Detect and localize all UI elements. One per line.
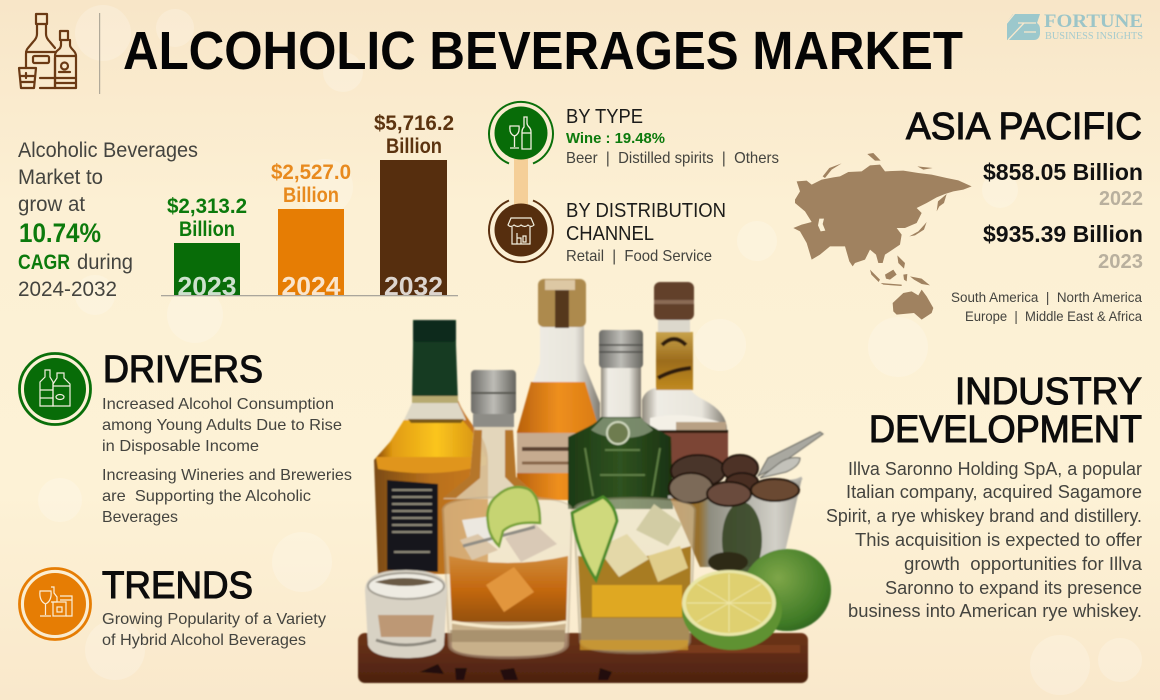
text: industry development: Illva Saronno Holding SpA, a popular — [848, 459, 1142, 479]
text: driver one: among Young Adults Due to Rise — [102, 417, 342, 434]
icon: by type — [489, 102, 553, 164]
Asia Pacific values: $935.39 Billion — [983, 221, 1143, 247]
text: industry development: business into American rye whiskey. — [848, 601, 1142, 621]
lime half — [682, 570, 782, 650]
whole lime — [743, 549, 831, 631]
bar: 2023: Billion — [179, 218, 235, 241]
icon: bottles and glass — [19, 14, 76, 88]
glass: golden whisky — [574, 498, 695, 653]
caspian — [818, 219, 825, 231]
heading: industry development: DEVELOPMENT — [869, 409, 1142, 451]
text: industry development: Saronno to expand its presence — [885, 578, 1142, 598]
heading: trends: TRENDS — [102, 565, 253, 607]
Asia Pacific values: $858.05 Billion — [983, 159, 1143, 185]
heading: industry development — [869, 371, 1142, 451]
bar: 2023: 2023 — [178, 271, 236, 301]
bar: 2032 — [374, 112, 454, 301]
text: industry development — [826, 459, 1143, 621]
text: industry development: Italian company, acquired Sagamore — [846, 482, 1142, 502]
Asia Pacific values: 2022 — [1099, 188, 1143, 210]
illustration: bottles, glasses and limes on a board — [358, 279, 831, 683]
bottle: center tall amber — [517, 279, 600, 500]
heading: Asia Pacific: ASIA PACIFIC — [906, 106, 1142, 148]
text: by type — [566, 106, 779, 167]
CAGR text block: Alcoholic Beverages — [18, 139, 198, 162]
bar: 2032: $5,716.2 — [374, 112, 454, 135]
Asia Pacific values: 2023 — [1098, 251, 1143, 273]
CAGR text block: Market to — [18, 166, 103, 189]
text: industry development: This acquisition is expected to offer — [855, 530, 1142, 550]
text: driver one: Increased Alcohol Consumption — [102, 396, 334, 413]
bar: 2032: 2032 — [384, 271, 443, 301]
lime wedge right — [572, 497, 617, 580]
heading: industry development: INDUSTRY — [955, 371, 1142, 413]
text: industry development: Spirit, a rye whiskey brand and distillery. — [826, 506, 1142, 526]
Asia Pacific values — [983, 159, 1143, 273]
text: trends description: Growing Popularity of a Variety — [102, 611, 326, 628]
icon: by distribution channel — [489, 200, 553, 262]
logo: Fortune Business Insights — [1006, 11, 1143, 42]
board — [358, 633, 808, 683]
shot glass — [365, 570, 447, 658]
text: by type: Beer | Distilled spirits | Others — [566, 150, 779, 167]
other regions: Europe | Middle East & Africa — [965, 309, 1142, 324]
text: by type: BY TYPE — [566, 106, 643, 128]
other regions: South America | North America — [951, 290, 1142, 305]
heading: drivers: DRIVERS — [103, 349, 263, 391]
text: driver two: Beverages — [102, 509, 178, 526]
logo: Fortune Business Insights: FORTUNE — [1044, 11, 1143, 32]
CAGR text block: 2024-2032 — [18, 278, 117, 301]
panel: trends — [20, 565, 326, 649]
bar: 2023 — [167, 195, 247, 301]
connector between segment icons — [514, 158, 528, 206]
bottle: left whisky — [374, 320, 488, 574]
icon: drivers — [20, 354, 90, 424]
text: trends description — [102, 611, 326, 649]
text: industry development: growth opportunities for Illva — [904, 554, 1143, 574]
text: trends description: of Hybrid Alcohol Beverages — [102, 632, 306, 649]
other regions — [951, 290, 1142, 324]
CAGR text block — [18, 139, 198, 301]
bottle: silver cap — [443, 370, 541, 499]
text: by distribution channel: CHANNEL — [566, 223, 654, 245]
text: driver one: in Disposable Income — [102, 438, 259, 455]
bar chart — [161, 112, 458, 301]
bottle: back right with brown cap — [642, 282, 728, 473]
text: by distribution channel: BY DISTRIBUTION — [566, 200, 726, 222]
bar: 2024 — [271, 161, 351, 301]
text: driver two: Increasing Wineries and Breweries — [102, 467, 352, 484]
bar: 2032: Billion — [386, 135, 442, 158]
CAGR text block: grow at — [18, 193, 85, 216]
title: ALCOHOLIC BEVERAGES MARKET — [123, 21, 963, 81]
glass: amber whisky — [443, 497, 572, 658]
CAGR text block: during — [77, 251, 133, 274]
logo: Fortune Business Insights: BUSINESS INSIGHTS — [1045, 31, 1143, 42]
bar: 2024: 2024 — [282, 271, 341, 301]
CAGR text block: CAGR — [18, 251, 70, 274]
divider — [99, 13, 100, 94]
text: driver one — [102, 396, 342, 455]
lime wedge left — [487, 487, 540, 546]
bucket with macarons — [668, 432, 823, 578]
panel: drivers — [20, 349, 352, 526]
text: by distribution channel — [566, 200, 726, 265]
map: Asia Pacific — [793, 153, 972, 320]
text: by distribution channel: Retail | Food Service — [566, 248, 712, 265]
bar: 2024: $2,527.0 — [271, 161, 351, 184]
text: driver two — [102, 467, 352, 526]
text: driver two: are Supporting the Alcoholic — [102, 488, 311, 505]
bottle: green — [568, 330, 673, 509]
text: by type: Wine : 19.48% — [566, 130, 665, 147]
icon: trends — [20, 568, 90, 640]
bar: 2024: Billion — [283, 184, 339, 207]
CAGR text block: 10.74% — [19, 218, 101, 248]
bar: 2023: $2,313.2 — [167, 195, 247, 218]
